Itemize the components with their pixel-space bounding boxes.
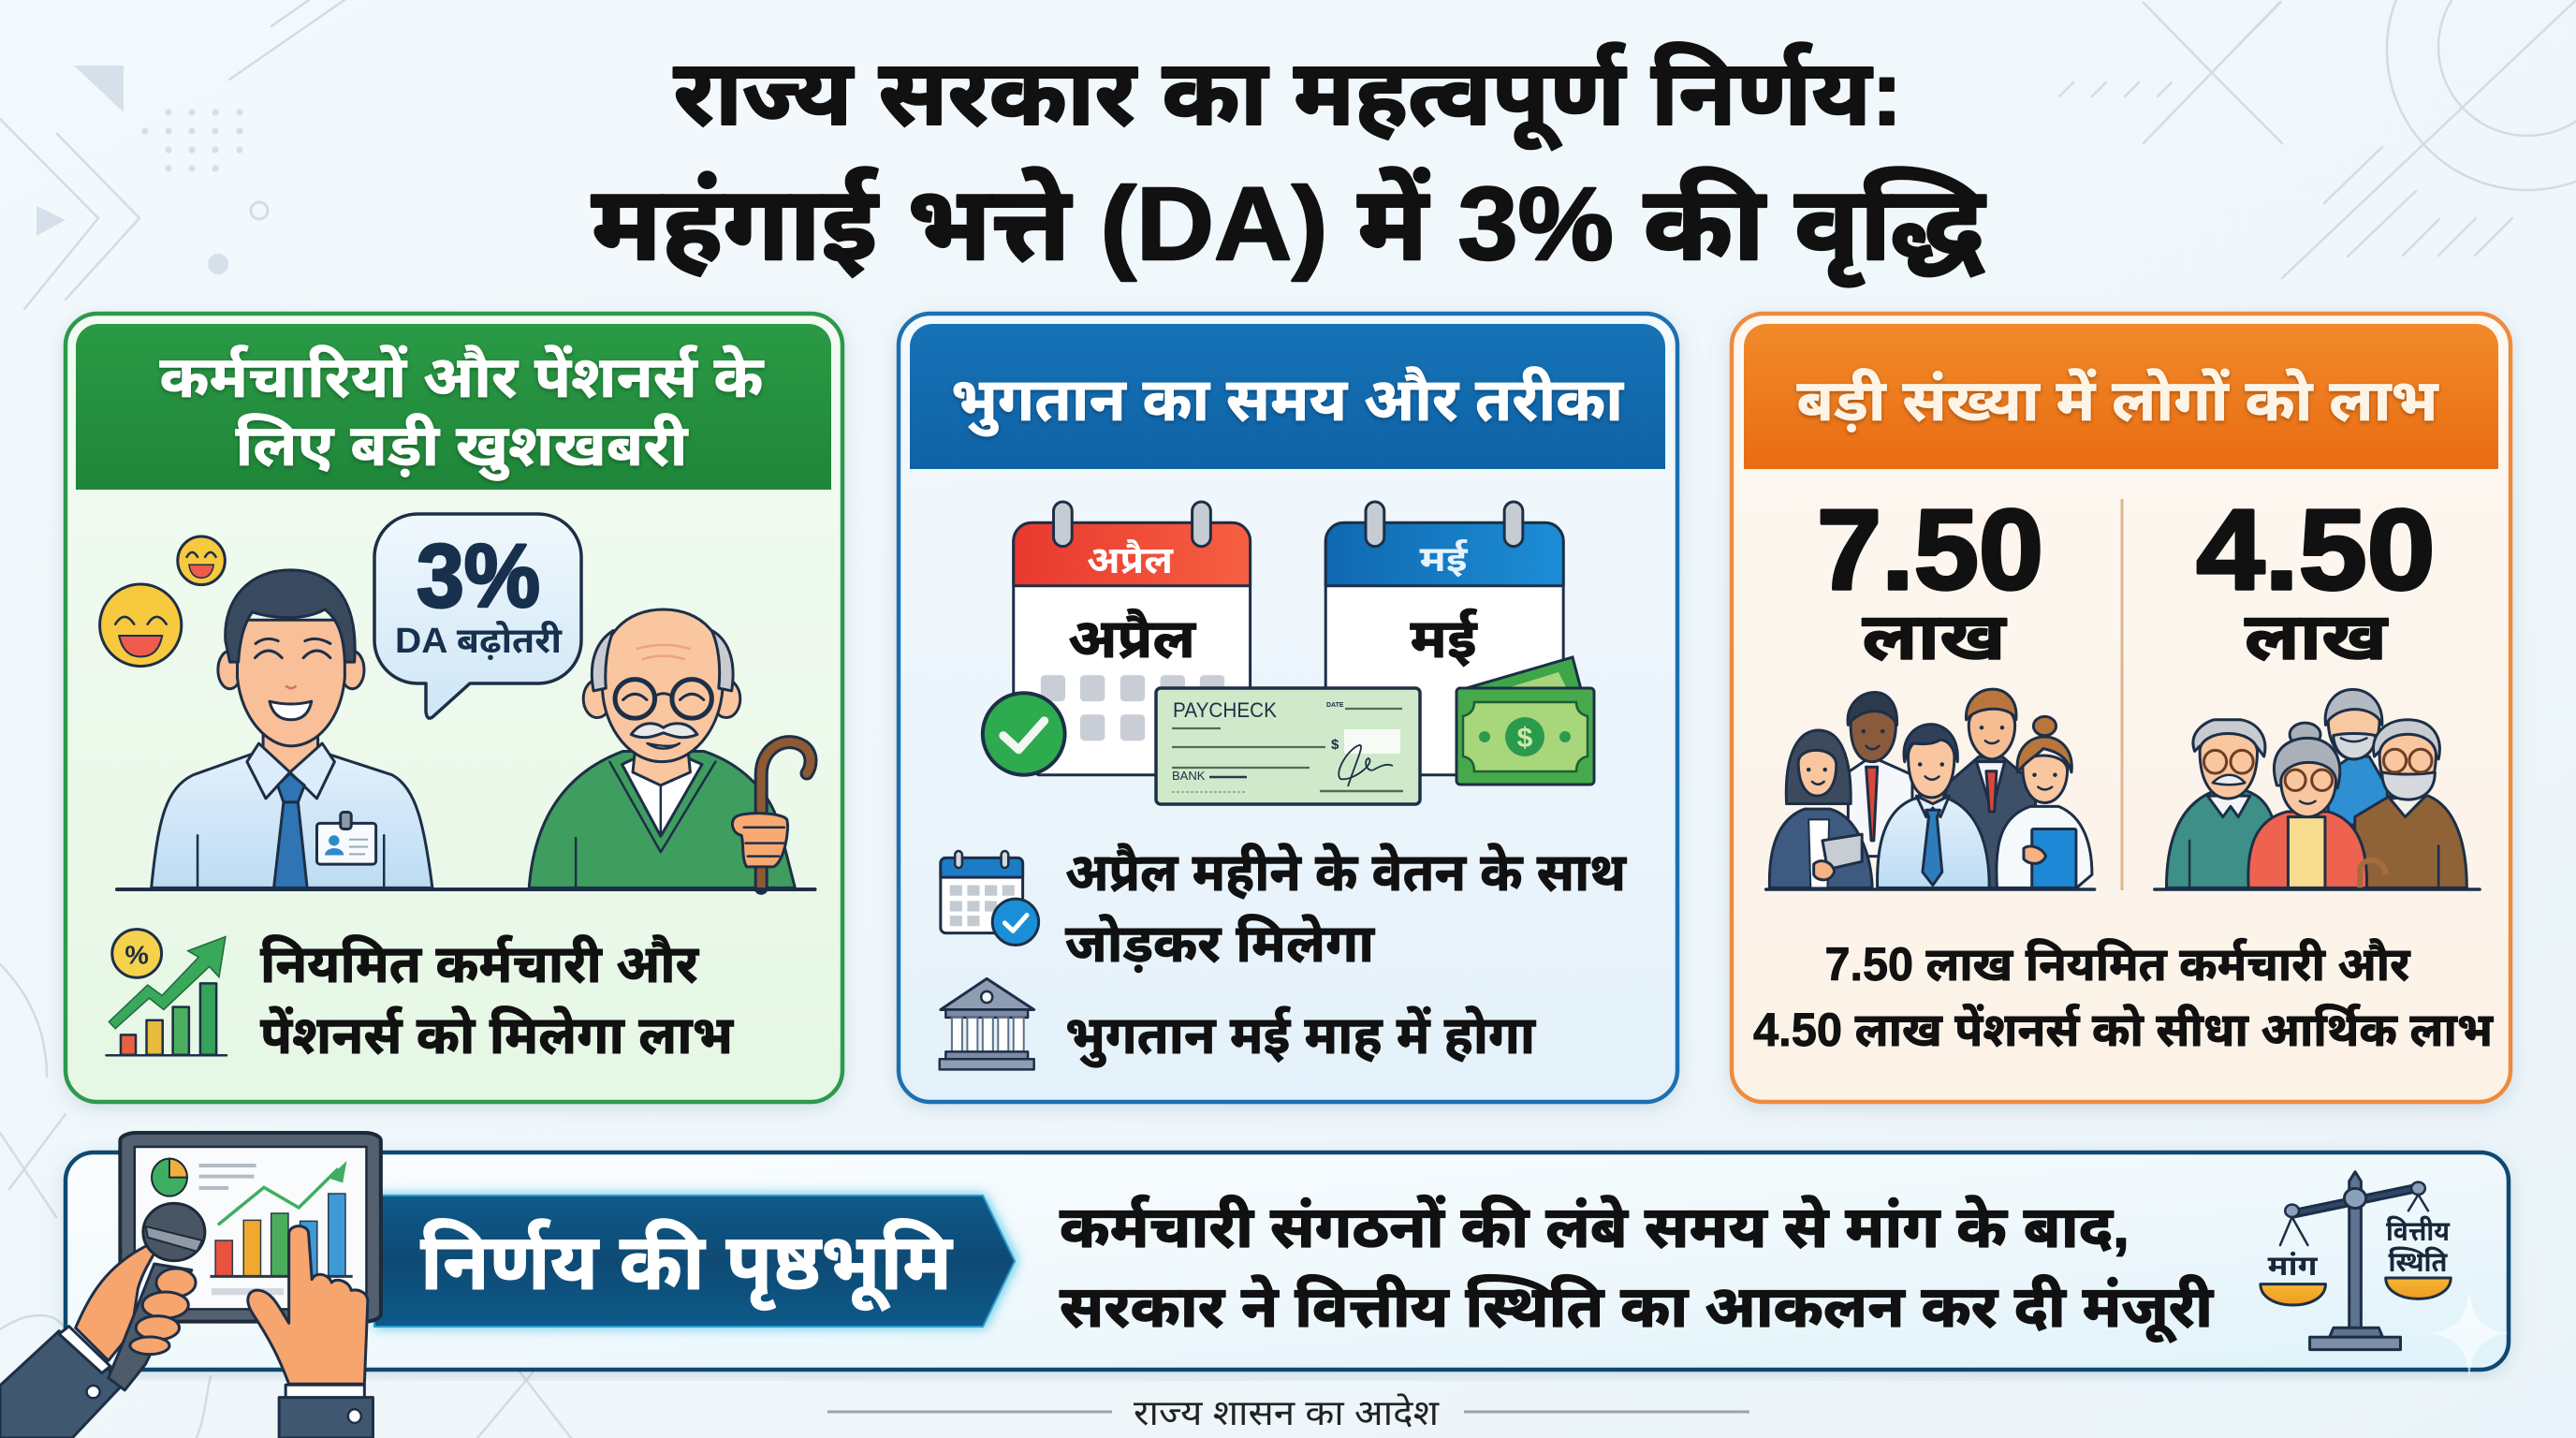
illustration: tablet and hands [0,1133,381,1438]
stat: 7.50 lakh employees: 7.50 [1817,486,2043,613]
paycheck [1156,688,1420,804]
text: payment in May: भुगतान मई माह में होगा [1065,1005,1536,1068]
title: राज्य सरकार का महत्वपूर्ण निर्णय: [674,41,1902,151]
stat: 7.50 lakh employees [1817,486,2043,673]
title: महंगाई भत्ते (DA) में 3% की वृद्धि [592,166,1986,288]
illustration: group of employees [1766,689,2095,889]
panel: large number of beneficiaries [1732,314,2510,1102]
text: regular employees and pensioners benefit [260,934,734,1064]
ground line [117,888,815,891]
header text [159,344,765,481]
icon: small smile emoji [178,536,225,585]
label arrow [374,1194,1018,1328]
icon: balance scale: स्थिति [2389,1246,2449,1278]
calendar: May: मई [1419,538,1469,580]
text: background statement [1060,1194,2215,1343]
text: paid with April salary: जोड़कर मिलेगा [1065,914,1376,973]
illustration: group of pensioners [2155,690,2480,889]
panel header: orange [1744,324,2498,469]
paycheck: DATE [1326,702,1344,709]
banner: decision background [0,1133,2509,1438]
header text: भुगतान का समय और तरीका [951,366,1624,437]
icon: growth chart with percent: % [124,941,149,971]
header text: बड़ी संख्या में लोगों को लाभ [1797,368,2439,433]
title [592,41,1986,288]
icon: green check [983,693,1065,775]
header text: कर्मचारियों और पेंशनर्स के [159,344,765,410]
divider [2121,499,2123,890]
header text: लिए बड़ी खुशखबरी [236,413,689,481]
tablet [120,1133,381,1322]
ground line [1766,888,2095,891]
illustration: calendars, paycheck and cash [983,502,1594,804]
paycheck: $ [1331,737,1339,753]
icon: bank [940,978,1034,1069]
text: paid with April salary: अप्रैल महीने के वेतन के साथ [1065,843,1627,902]
calendar: May: मई [1410,609,1478,669]
text: paid with April salary [1065,843,1627,973]
stat: 4.50 lakh pensioners [2196,486,2436,673]
right hand pointing [248,1226,373,1438]
icon: large smile emoji [100,584,182,667]
icon: balance scale: मांग [2267,1251,2318,1282]
stat: 4.50 lakh pensioners: लाख [2245,600,2389,673]
text: regular employees and pensioners benefit: पेंशनर्स को मिलेगा लाभ [260,1005,734,1064]
text: benefit summary: 7.50 लाख नियमित कर्मचारी और [1825,938,2410,990]
icon: sparkle watermark [2430,1289,2509,1378]
paycheck: BANK [1172,769,1206,783]
paycheck: PAYCHECK [1173,698,1277,722]
speech bubble: 3% DA increase: 3% [417,526,540,626]
icon: growth chart with percent [106,930,227,1055]
panel header: green [76,324,831,490]
text: background statement: कर्मचारी संगठनों की लंबे समय से मांग के बाद, [1060,1194,2130,1260]
left hand with microphone [0,1203,205,1438]
panel: payment timing and method [899,314,1677,1102]
calendar: April: अप्रैल [1068,608,1196,669]
icon: cash bills: $ [1517,723,1533,754]
icon: cash bills [1456,657,1594,785]
stat: 7.50 lakh employees: लाख [1863,600,2007,673]
stat: 4.50 lakh pensioners: 4.50 [2196,486,2436,613]
calendar: May [1325,502,1563,775]
text: background statement: सरकार ने वित्तीय स्थिति का आकलन कर दी मंजूरी [1060,1273,2215,1343]
calendar: April: अप्रैल [1087,538,1175,581]
label arrow: निर्णय की पृष्ठभूमि [420,1218,953,1311]
pensioner figure [529,609,795,888]
employee figure [152,570,432,888]
calendar: April [1014,502,1251,775]
ground line [2155,888,2480,891]
speech bubble: 3% DA increase [374,514,581,718]
text: benefit summary [1753,938,2494,1056]
panel header: blue [910,324,1665,469]
illustration: employee, pensioner and emojis [100,536,815,889]
icon: balance scale [2261,1172,2451,1350]
footer: state government order: राज्य शासन का आदेश [1134,1392,1440,1433]
icon: walking cane and hand [732,742,811,888]
text: regular employees and pensioners benefit: नियमित कर्मचारी और [260,934,699,993]
text: benefit summary: 4.50 लाख पेंशनर्स को सीधा आर्थिक लाभ [1753,1004,2494,1056]
panel: good news for employees and pensioners [66,314,842,1102]
icon: balance scale: वित्तीय [2386,1215,2451,1247]
icon: calendar with check [941,851,1039,945]
speech bubble: 3% DA increase: DA बढ़ोतरी [395,620,563,661]
